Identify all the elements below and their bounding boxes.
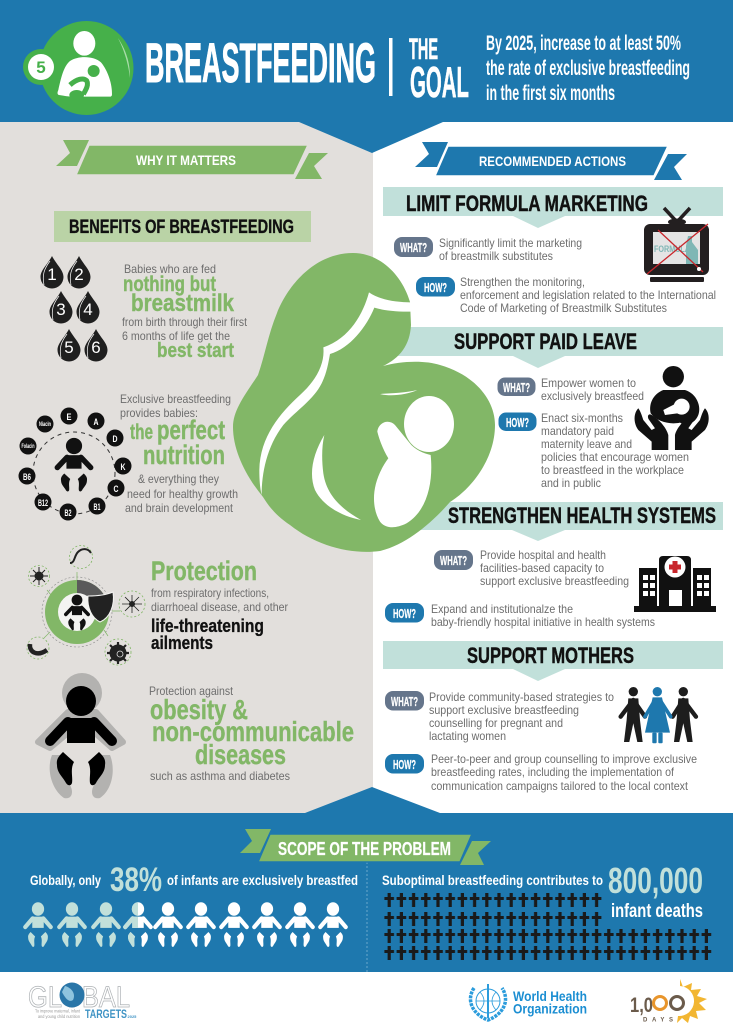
- heading band: SUPPORT MOTHERS: [467, 643, 634, 668]
- text: protection: diarrhoeal disease, and other: [151, 600, 288, 614]
- icon: six months drops: 5: [64, 338, 74, 357]
- text: protection: ailments: [151, 633, 213, 653]
- what text: lactating women: [429, 729, 506, 743]
- how text: policies that encourage women: [541, 450, 689, 464]
- icon: vitamin ring with baby: C: [114, 484, 119, 494]
- icon: six months drops: 1: [47, 265, 57, 284]
- icon: vitamin ring with baby: [18, 408, 132, 520]
- benefits heading: [54, 211, 311, 242]
- what pill: [497, 377, 536, 396]
- text: obesity and non-communicable diseases: [149, 684, 354, 783]
- icon: vitamin ring with baby: B1: [94, 502, 100, 512]
- how text: Peer-to-peer and group counselling to improve exclusive: [431, 752, 697, 766]
- what text: Provide community-based strategies to: [429, 690, 614, 704]
- ribbon: scope heading: SCOPE OF THE PROBLEM: [278, 839, 451, 859]
- icon: crossed-out formula tv: FORMULA: [654, 244, 690, 254]
- panel: scope of the problem: [0, 787, 733, 972]
- icon: vitamin ring with baby: A: [94, 417, 99, 427]
- goal statement: in the first six months: [486, 82, 615, 105]
- icon: vitamin ring with baby: Folacin: [22, 444, 35, 450]
- how text: [431, 752, 697, 793]
- logo: 1000 days: [630, 979, 707, 1024]
- the goal: THE: [409, 33, 438, 66]
- heading band: LIMIT FORMULA MARKETING: [406, 191, 648, 216]
- text: the perfect nutrition: provides babies:: [120, 406, 198, 420]
- stat: 38 percent: 38%: [110, 861, 162, 899]
- icon: vitamin ring with baby: B2: [64, 508, 72, 518]
- text: obesity and non-communicable diseases: Protection against: [149, 684, 234, 698]
- logo: global targets: GLOBAL: [28, 981, 130, 1014]
- text: the perfect nutrition: perfect: [157, 415, 225, 445]
- icon: hospital: [634, 556, 716, 612]
- icon: vitamin ring with baby: B6: [23, 472, 31, 482]
- stat: 800,000 infant deaths: Suboptimal breastfeeding contributes to: [382, 872, 603, 888]
- ribbon: why it matters: [56, 140, 328, 179]
- how pill: HOW?: [393, 606, 416, 621]
- logo: global targets: To improve maternal, infant: [35, 1008, 81, 1014]
- how pill: [416, 277, 455, 296]
- logo: 1000 days: 1,0: [630, 994, 653, 1017]
- icon: baby with grey outline: [38, 673, 123, 798]
- benefits heading: BENEFITS OF BREASTFEEDING: [69, 217, 294, 238]
- text: the perfect nutrition: need for healthy growth: [127, 487, 238, 501]
- how text: to breastfeed in the workplace: [541, 463, 684, 477]
- ribbon: recommended actions: [415, 142, 687, 180]
- the goal: [409, 33, 469, 107]
- heading band: [383, 327, 723, 368]
- how pill: HOW?: [424, 280, 447, 295]
- icon: target 5 badge: [23, 21, 134, 115]
- what text: [541, 376, 644, 403]
- logo: global targets: 2025: [128, 1014, 137, 1019]
- how text: [541, 411, 689, 490]
- text: protection: [151, 556, 288, 653]
- text: nothing but breastmilk: [122, 262, 248, 362]
- what text: support exclusive breastfeeding: [480, 574, 629, 588]
- what pill: WHAT?: [503, 380, 530, 395]
- icon: six months drops: 6: [91, 338, 101, 357]
- text: obesity and non-communicable diseases: non-communicable: [152, 716, 354, 747]
- ribbon: why it matters: WHY IT MATTERS: [136, 152, 236, 168]
- text: obesity and non-communicable diseases: diseases: [195, 739, 286, 770]
- what text: Empower women to: [541, 376, 636, 390]
- text: nothing but breastmilk: breastmilk: [131, 290, 235, 317]
- icon: six months drops: 2: [74, 265, 84, 284]
- panel: support mothers: [383, 641, 723, 793]
- stat: 38 percent: [30, 861, 358, 899]
- how pill: [385, 754, 424, 774]
- illustration: mother and baby: [233, 253, 495, 552]
- heading band: [420, 502, 723, 541]
- what text: counselling for pregnant and: [429, 716, 563, 730]
- text: the perfect nutrition: and brain development: [125, 501, 234, 515]
- heading band: SUPPORT PAID LEAVE: [454, 329, 637, 354]
- goal statement: [486, 32, 690, 105]
- what text: Significantly limit the marketing: [439, 236, 582, 250]
- text: nothing but breastmilk: best start: [157, 340, 234, 362]
- icon: six months drops: [40, 256, 108, 362]
- logo: 1000 days: DAYS: [643, 1018, 673, 1024]
- pictogram: rows of crosses: [383, 893, 712, 960]
- how text: Strengthen the monitoring,: [460, 275, 585, 289]
- text: obesity and non-communicable diseases: such as asthma and diabetes: [150, 769, 290, 783]
- text: nothing but breastmilk: Babies who are fed: [124, 262, 216, 276]
- what pill: [434, 550, 473, 570]
- logo: global targets: TARGETS: [85, 1007, 127, 1021]
- what text: support exclusive breastfeeding: [429, 703, 579, 717]
- icon: vitamin ring with baby: D: [112, 434, 118, 444]
- panel: support paid leave: [383, 327, 723, 450]
- how text: communication campaigns tailored to the local context: [431, 779, 689, 793]
- icon: vitamin ring with baby: E: [66, 412, 72, 422]
- icon: vitamin ring with baby: K: [120, 462, 126, 472]
- how text: Code of Marketing of Breastmilk Substitutes: [460, 301, 667, 315]
- what pill: WHAT?: [391, 694, 418, 709]
- stat: 38 percent: Globally, only: [30, 872, 101, 888]
- logo: world health organization: [470, 984, 587, 1020]
- text: nothing but breastmilk: from birth through their first: [122, 315, 248, 329]
- what pill: WHAT?: [400, 240, 427, 255]
- text: protection: life-threatening: [151, 616, 264, 636]
- text: protection: Protection: [151, 556, 257, 586]
- text: the perfect nutrition: [120, 392, 238, 515]
- text: the perfect nutrition: the: [130, 421, 153, 444]
- header: [0, 0, 733, 153]
- heading band: [383, 187, 723, 228]
- stat: 38 percent: of infants are exclusively breastfed: [167, 872, 358, 888]
- text: protection: from respiratory infections,: [151, 586, 269, 600]
- text: nothing but breastmilk: nothing but: [123, 273, 216, 296]
- what text: facilities-based capacity to: [480, 561, 604, 575]
- ribbon: recommended actions: RECOMMENDED ACTIONS: [479, 153, 626, 169]
- paid leave what/how labels: [497, 376, 689, 490]
- header: GOAL: [410, 58, 469, 107]
- text: the perfect nutrition: nutrition: [143, 440, 225, 470]
- what text: [429, 690, 614, 743]
- text: the perfect nutrition: Exclusive breastfeeding: [120, 392, 231, 406]
- icon: three people: [621, 687, 696, 743]
- what pill: [385, 691, 424, 710]
- icon: target 5 badge: 5: [36, 58, 46, 77]
- how text: Enact six-months: [541, 411, 623, 425]
- how text: breastfeeding rates, including the implementation of: [431, 765, 675, 779]
- stat: 800,000 infant deaths: infant deaths: [611, 901, 703, 922]
- logo: world health organization: World Health: [513, 988, 587, 1004]
- what text: [439, 236, 582, 263]
- stat: 800,000 infant deaths: [382, 860, 703, 922]
- icon: protection ring, shield and pathogens: [27, 546, 145, 665]
- how text: maternity leave and: [541, 437, 632, 451]
- icon: six months drops: 3: [56, 300, 66, 319]
- what text: [480, 548, 629, 588]
- text: obesity and non-communicable diseases: obesity &: [150, 694, 248, 725]
- logo: world health organization: Organization: [513, 1000, 587, 1016]
- how text: [460, 275, 716, 315]
- what pill: WHAT?: [440, 553, 467, 568]
- what text: Provide hospital and health: [480, 548, 606, 562]
- how pill: [498, 412, 537, 432]
- icon: six months drops: 4: [83, 300, 93, 319]
- how text: mandatory paid: [541, 424, 614, 438]
- ribbon: scope heading: [240, 829, 491, 865]
- how text: [431, 602, 655, 629]
- how pill: [385, 603, 424, 622]
- what text: exclusively breastfeed: [541, 389, 644, 403]
- left panel background: [0, 122, 373, 814]
- panel: limit formula marketing: [383, 187, 723, 315]
- panel: strengthen health systems: [385, 502, 723, 629]
- icon: crossed-out formula tv: [644, 208, 709, 282]
- logo: global targets: and young child nutrition: [38, 1014, 80, 1019]
- icon: mother in hands: [635, 366, 709, 450]
- icon: vitamin ring with baby: B12: [38, 498, 48, 508]
- what pill: [394, 237, 433, 257]
- how pill: HOW?: [393, 757, 416, 772]
- text: the perfect nutrition: & everything they: [138, 472, 219, 486]
- heading band: [383, 641, 723, 681]
- how text: and in public: [541, 476, 601, 490]
- pictogram: ten babies: [25, 902, 346, 947]
- how pill: HOW?: [506, 415, 529, 430]
- what text: of breastmilk substitutes: [439, 249, 553, 263]
- icon: vitamin ring with baby: Niacin: [39, 422, 51, 428]
- how text: Expand and institutionalze the: [431, 602, 573, 616]
- text: nothing but breastmilk: 6 months of life get the: [122, 329, 230, 343]
- header: BREASTFEEDING: [145, 31, 376, 94]
- how text: baby-friendly hospital initiative in health systems: [431, 615, 655, 629]
